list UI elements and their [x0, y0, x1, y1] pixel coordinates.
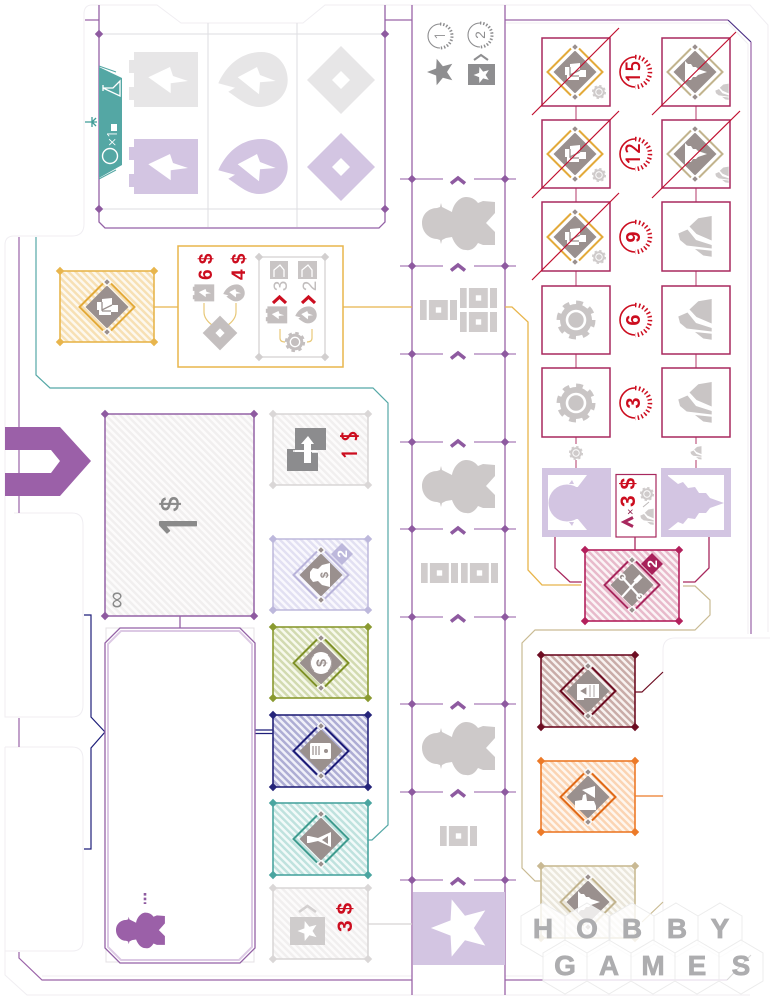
- big star tile: [413, 892, 505, 965]
- meeple 1: [422, 197, 495, 250]
- crimson connectors: [555, 537, 709, 582]
- price 6 $: 6 $: [196, 253, 217, 280]
- mini price box: [616, 474, 656, 537]
- yellow route line: [154, 307, 581, 585]
- meeple 2: [422, 460, 495, 513]
- icon: grey battery: [129, 52, 198, 107]
- watermark: HOBBY GAMES: [521, 903, 763, 994]
- badge: second place star box: [468, 23, 495, 85]
- panel: big octagon: [105, 628, 255, 963]
- center column: [400, 23, 516, 965]
- icon: grey drop: [218, 52, 288, 107]
- badge: first place star: 1: [434, 32, 448, 40]
- mini price box: ×: [625, 509, 637, 515]
- track: connectors: [576, 106, 696, 468]
- card: grey swap 1 $: [269, 410, 372, 489]
- card: crimson tools: [581, 546, 683, 625]
- watermark: HOBBY GAMES: A: [599, 950, 619, 981]
- slot 9 left: [542, 202, 610, 271]
- value 1$: $: [155, 496, 185, 511]
- teal tab: ×1: [106, 130, 119, 146]
- price 3 $: 3 $: [334, 902, 357, 932]
- score: 12: [620, 139, 650, 169]
- tan route line: [522, 586, 710, 922]
- track: upgrade forest column: [662, 38, 730, 437]
- card: yellow factory: [56, 267, 158, 346]
- inner upgrade box: 2: [300, 281, 321, 291]
- card: teal funnel: [269, 799, 372, 879]
- score: 12: 12: [624, 142, 643, 166]
- icon: wrench and screwdriver: [619, 574, 643, 600]
- card: green coin: [269, 623, 372, 702]
- teal arrow: [85, 117, 97, 127]
- small gear and rock: [570, 446, 702, 460]
- card: lilac pawn: [269, 535, 372, 614]
- badge: first place star: [427, 24, 452, 85]
- teal route line: [36, 237, 388, 840]
- slot 15 left: [542, 38, 610, 106]
- icon: grey gem: [307, 46, 375, 114]
- price 4 $: 4 $: [229, 253, 250, 280]
- panel: top energy grid: [85, 5, 389, 228]
- panel: yellow prices: [178, 246, 343, 367]
- score: 15: [620, 57, 650, 87]
- battery and drop to gem: [193, 284, 245, 350]
- navy route lines: [84, 615, 273, 849]
- scale markers: [400, 179, 516, 880]
- score: 6: [620, 305, 650, 335]
- watermark: HOBBY GAMES: S: [732, 950, 750, 981]
- card: big coin box: [101, 410, 258, 620]
- value 1$: [155, 496, 205, 540]
- purple entry arrow: [5, 427, 91, 496]
- score: 6: 6: [623, 314, 645, 326]
- inner upgrade box: [255, 253, 329, 361]
- slot 6 left: [542, 286, 610, 354]
- card: orange machine: [537, 757, 663, 836]
- icon: star box: [290, 906, 325, 945]
- score: 9: [620, 222, 650, 252]
- score: 15: 15: [624, 60, 643, 84]
- badge 2: 2: [644, 560, 660, 568]
- card: lilac pawn: $: [319, 572, 331, 578]
- more dots: [144, 893, 146, 904]
- card: green coin: $: [313, 659, 329, 667]
- score: 9: 9: [623, 231, 645, 243]
- red strike-through slashes: [532, 28, 740, 280]
- slot 3 left: [542, 368, 610, 437]
- card: maroon scroll: [537, 651, 663, 731]
- connector: [179, 616, 181, 628]
- card: tan tree: [537, 862, 639, 942]
- bricks group 3: [440, 826, 477, 846]
- card: grey star box 3 $: [269, 884, 372, 963]
- mini price box: 3 $: [617, 477, 640, 507]
- badge: second place star box: 2: [472, 31, 488, 39]
- watermark: HOBBY GAMES: O: [576, 913, 598, 944]
- icon: lilac gem: [307, 133, 375, 201]
- lilac block: meeple cutout: [542, 468, 611, 537]
- slot 3 right: [662, 368, 730, 437]
- value 1$: 1: [156, 510, 205, 540]
- icon: swap arrow: [287, 428, 326, 471]
- price 1 $: 1 $: [339, 430, 360, 460]
- score: 3: [620, 388, 650, 418]
- watermark: HOBBY GAMES: B: [667, 913, 687, 944]
- watermark: HOBBY GAMES: B: [622, 913, 642, 944]
- icon: lilac drop: [218, 139, 288, 194]
- lilac block: tree cutout: [661, 468, 731, 537]
- icon: lilac battery: [129, 139, 198, 194]
- slot 15 right: [662, 38, 730, 106]
- watermark: HOBBY GAMES: G: [554, 950, 576, 981]
- watermark: HOBBY GAMES: M: [641, 950, 665, 981]
- meeple purple: [116, 913, 165, 948]
- bricks group 2: [421, 563, 498, 583]
- slot 9 right: [662, 202, 730, 271]
- card: navy document: [269, 711, 372, 791]
- watermark: HOBBY GAMES: H: [533, 913, 553, 944]
- slot 12 left: [542, 120, 610, 188]
- bricks group 1: [420, 288, 497, 332]
- watermark: HOBBY GAMES: Y: [711, 913, 730, 944]
- badge 2: 2: [334, 550, 350, 558]
- score: 3: 3: [623, 397, 645, 409]
- infinity mark: ∞: [103, 591, 130, 609]
- inner upgrade box: 3: [271, 281, 292, 291]
- slot 12 right: [662, 120, 730, 188]
- watermark: HOBBY GAMES: E: [688, 950, 706, 981]
- teal tab: [99, 66, 122, 179]
- track: upgrade factory column: [542, 38, 610, 437]
- meeple 3: [422, 722, 495, 775]
- slot 6 right: [662, 286, 730, 354]
